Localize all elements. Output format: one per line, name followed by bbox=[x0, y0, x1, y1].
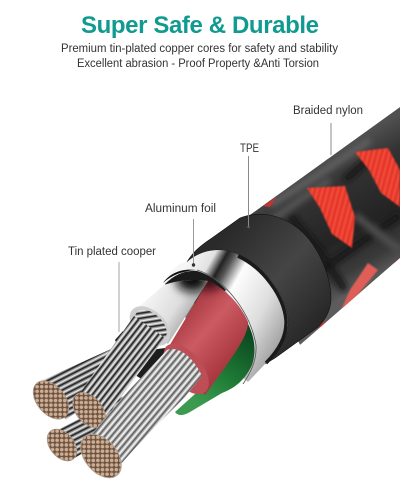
label: braided nylon bbox=[293, 105, 363, 155]
foil inner crescent bbox=[163, 270, 196, 283]
cable interior shadow bbox=[165, 271, 226, 305]
shadow on sleeve bbox=[176, 268, 208, 292]
copper strand bundle front bbox=[73, 349, 202, 485]
label: TPE: TPE bbox=[240, 143, 259, 155]
strand end bbox=[73, 427, 129, 485]
red slivers on jacket edges bbox=[263, 153, 400, 327]
strand end bbox=[41, 423, 83, 467]
label: tin plated copper: Tin plated cooper bbox=[68, 246, 156, 258]
label: braided nylon: Braided nylon bbox=[293, 105, 363, 117]
aluminum foil layer bbox=[163, 250, 288, 382]
label: aluminum foil: Aluminum foil bbox=[145, 203, 216, 215]
white wire sleeve bbox=[130, 280, 208, 346]
TPE layer bbox=[187, 214, 331, 364]
dark wire core fragments bbox=[115, 331, 165, 381]
label: TPE bbox=[240, 143, 259, 228]
red braid patch centre bbox=[307, 186, 355, 248]
foil edge bbox=[197, 270, 256, 384]
copper strand bundle upper bbox=[66, 316, 165, 434]
TPE inner shadow bbox=[238, 256, 286, 363]
label: aluminum foil bbox=[145, 203, 216, 267]
sleeve rim bbox=[122, 299, 178, 353]
copper strand bundle back left bbox=[26, 345, 135, 426]
subtitle text block: Excellent abrasion - Proof Property &Anti Torsion bbox=[77, 58, 319, 70]
label: tin plated copper bbox=[68, 246, 156, 332]
white gap between strands bbox=[121, 380, 145, 397]
subtitle text block bbox=[61, 43, 338, 70]
red wire rim bbox=[154, 336, 218, 402]
title: Super Safe & Durable bbox=[81, 12, 319, 39]
strand end bbox=[66, 386, 112, 434]
weave chevrons bbox=[268, 138, 400, 294]
strand end bbox=[26, 374, 76, 426]
green wire bbox=[175, 322, 254, 415]
copper strand bundle lower left bbox=[41, 395, 135, 467]
red wire bbox=[163, 281, 248, 395]
red braid patch lower bbox=[340, 263, 378, 312]
braided nylon jacket bbox=[240, 107, 400, 345]
red braid patch upper right bbox=[355, 148, 400, 207]
subtitle text block: Premium tin-plated copper cores for safety and stability bbox=[61, 43, 338, 55]
shadow on red wire bbox=[200, 281, 224, 298]
